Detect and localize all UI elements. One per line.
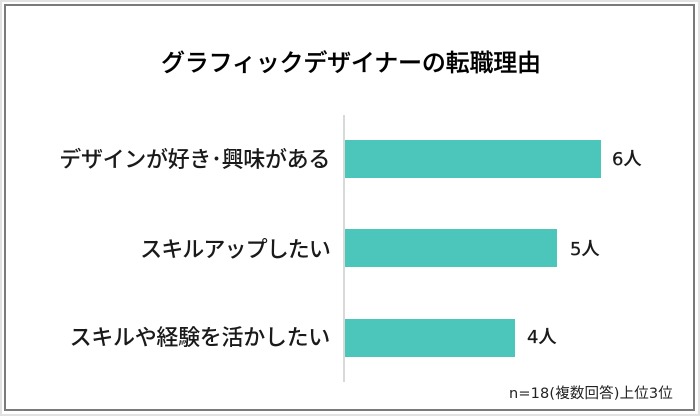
- bar: design: [345, 140, 601, 178]
- title: グラフィックデザイナーの転職理由: [161, 50, 541, 77]
- axis line: [343, 115, 345, 382]
- label: use skills: スキルや経験を活かしたい: [70, 325, 330, 350]
- value: 5: 5人: [570, 239, 599, 260]
- label: design: デザインが好き･興味がある: [59, 147, 330, 172]
- bar: use skills: [345, 319, 515, 357]
- label: skill up: スキルアップしたい: [140, 237, 330, 262]
- value: 4: 4人: [527, 327, 556, 348]
- bar: skill up: [345, 229, 557, 267]
- footnote: n=18(複数回答)上位3位: [509, 386, 673, 402]
- value: 6: 6人: [612, 149, 641, 170]
